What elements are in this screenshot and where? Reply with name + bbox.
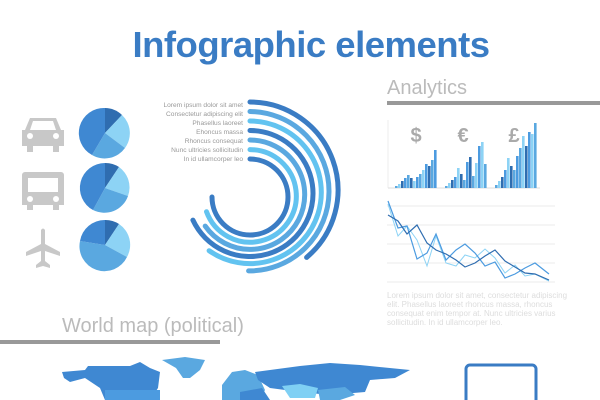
concentric arc chart bbox=[193, 102, 338, 271]
icon: plane bbox=[26, 228, 60, 268]
arc labels bbox=[163, 102, 243, 163]
arc labels: Nunc ultricies sollicitudin bbox=[171, 147, 243, 154]
analytics paragraph: consequat enim tempor at. Nunc ultricies varius bbox=[387, 309, 556, 318]
arc labels: In id ullamcorper leo bbox=[184, 156, 243, 163]
arc labels: Consectetur adipiscing elit bbox=[166, 111, 243, 118]
analytics paragraph: elit. Phasellus laoreet rhoncus massa, rhoncus bbox=[387, 300, 552, 309]
analytics paragraph bbox=[387, 291, 567, 327]
icon: bus bbox=[22, 172, 64, 210]
analytics paragraph: sollicitudin. In id ullamcorper leo. bbox=[387, 318, 503, 327]
world map heading bbox=[0, 315, 244, 344]
analytics paragraph: Lorem ipsum dolor sit amet, consectetur adipiscing bbox=[387, 291, 567, 300]
title: Infographic elements bbox=[132, 24, 490, 65]
analytics heading: Analytics bbox=[387, 77, 467, 99]
arc labels: Lorem ipsum dolor sit amet bbox=[163, 102, 243, 109]
line chart bbox=[387, 201, 555, 282]
icon: car bbox=[22, 118, 64, 152]
analytics heading bbox=[387, 77, 600, 105]
arc labels: Rhoncus consequat bbox=[185, 138, 243, 145]
bar chart: £ bbox=[508, 125, 520, 147]
bar chart: $ bbox=[410, 125, 422, 147]
bar chart: € bbox=[457, 125, 469, 147]
arc labels: Phasellus laoreet bbox=[192, 120, 243, 127]
pie charts bbox=[79, 108, 130, 271]
world map bbox=[62, 357, 410, 400]
device outline bbox=[466, 365, 536, 400]
world map heading: World map (political) bbox=[62, 315, 244, 337]
arc labels: Ehoncus massa bbox=[196, 129, 243, 136]
bar chart bbox=[388, 120, 540, 188]
